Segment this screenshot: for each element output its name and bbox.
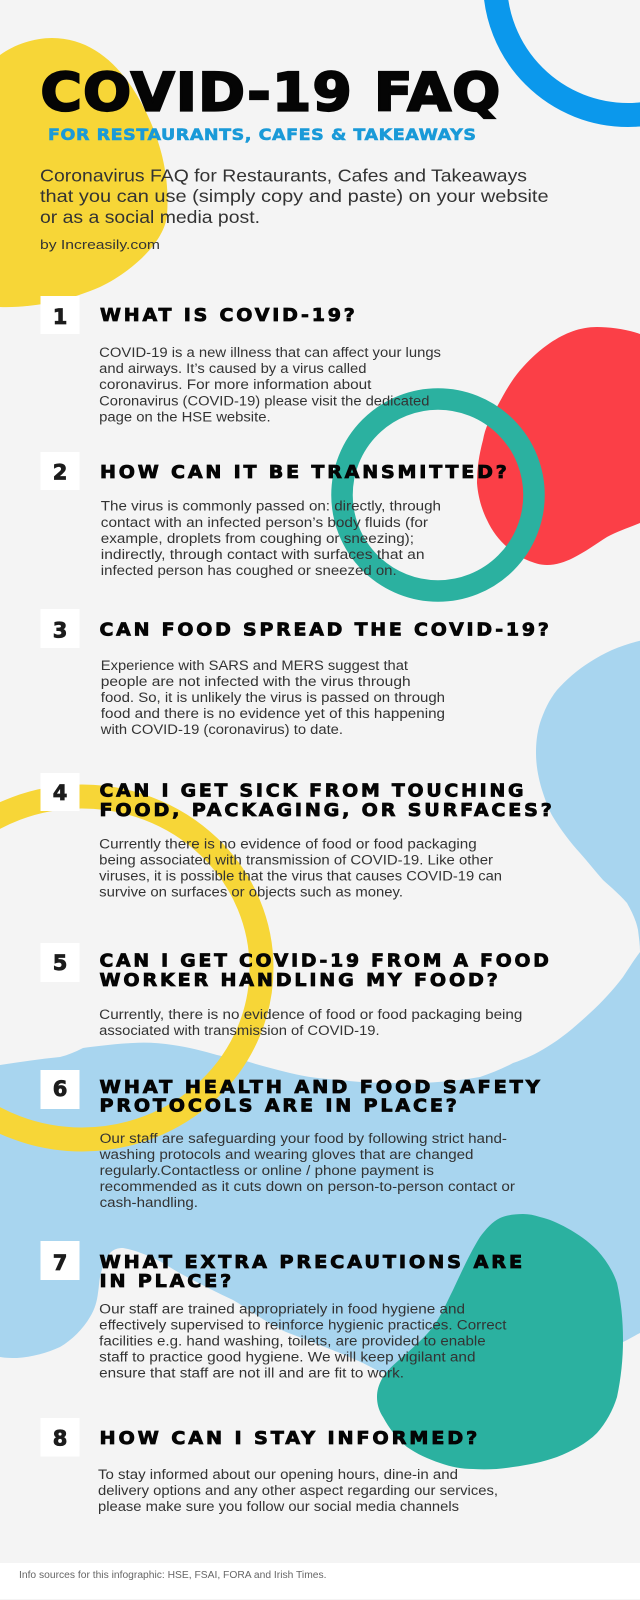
body 3: people are not infected with the virus through	[101, 674, 411, 689]
number badge 4: 4	[53, 781, 67, 805]
heading 5: WORKER HANDLING MY FOOD?	[100, 971, 501, 991]
heading 4	[100, 782, 555, 821]
number badge 1: 1	[53, 305, 67, 329]
intro text	[40, 165, 549, 227]
footer	[0, 1563, 640, 1599]
decorative blob: yellow top left	[0, 38, 168, 307]
header	[40, 62, 549, 252]
intro text: that you can use (simply copy and paste) on your website	[40, 186, 549, 206]
panel: FAQ 3	[40, 609, 552, 737]
body 6: cash-handling.	[100, 1195, 198, 1210]
number badge 7: 7	[53, 1251, 67, 1275]
body 4: being associated with transmission of COVID-19. Like other	[99, 852, 494, 867]
body 8: To stay informed about our opening hours, dine-in and	[98, 1467, 458, 1482]
panel: FAQ 7	[40, 1241, 525, 1381]
decorative ring: teal	[342, 399, 534, 591]
body 6: Our staff are safeguarding your food by following strict hand-	[100, 1131, 507, 1146]
body 1	[99, 345, 441, 424]
number badge 3: 3	[53, 619, 67, 643]
decorative blob: teal bottom right	[377, 1214, 623, 1469]
intro text: or as a social media post.	[40, 207, 260, 227]
intro text: Coronavirus FAQ for Restaurants, Cafes and Takeaways	[40, 165, 527, 185]
heading 7: WHAT EXTRA PRECAUTIONS ARE	[100, 1253, 525, 1273]
body 4	[99, 836, 502, 899]
subtitle: FOR RESTAURANTS, CAFES & TAKEAWAYS	[48, 125, 477, 144]
decorative blob: red	[477, 327, 640, 565]
title: COVID-19 FAQ	[40, 62, 502, 124]
heading 7: IN PLACE?	[100, 1272, 234, 1292]
number badge 7	[40, 1241, 80, 1280]
number badge 8: 8	[53, 1426, 67, 1450]
body 1: COVID-19 is a new illness that can affect your lungs	[99, 345, 441, 360]
body 3: food and there is no evidence yet of this happening	[101, 706, 445, 721]
body 8: delivery options and any other aspect regarding our services,	[98, 1483, 498, 1498]
footer sources text: Info sources for this infographic: HSE, FSAI, FORA and Irish Times.	[19, 1570, 326, 1581]
body 2: contact with an infected person’s body fluids (for	[101, 515, 429, 530]
decorative blob: light blue	[0, 641, 640, 1385]
body 2: example, droplets from coughing or sneezing);	[101, 531, 414, 546]
panel: FAQ 6	[40, 1070, 543, 1210]
body 2	[101, 499, 441, 578]
number badge 2: 2	[53, 461, 67, 485]
body 7: facilities e.g. hand washing, toilets, are provided to enable	[99, 1334, 486, 1348]
body 1: page on the HSE website.	[99, 410, 271, 424]
body 5	[99, 1007, 522, 1038]
body 1: Coronavirus (COVID-19) please visit the dedicated	[99, 394, 429, 408]
body 8	[98, 1467, 498, 1514]
number badge 1	[40, 296, 80, 334]
number badge 8	[40, 1418, 80, 1456]
body 4: survive on surfaces or objects such as money.	[99, 884, 403, 899]
body 2: indirectly, through contact with surfaces that an	[101, 547, 425, 562]
body 6: washing protocols and wearing gloves that are changed	[98, 1147, 474, 1162]
number badge 5: 5	[53, 951, 67, 975]
body 2: The virus is commonly passed on: directly, through	[101, 499, 441, 514]
body 8: please make sure you follow our social media channels	[98, 1499, 459, 1514]
heading 7	[100, 1253, 525, 1292]
number badge 3	[40, 609, 80, 648]
body 3: with COVID-19 (coronavirus) to date.	[100, 722, 343, 737]
body 4: viruses, it is possible that the virus that causes COVID-19 can	[99, 868, 502, 883]
number badge 6: 6	[53, 1077, 67, 1101]
decorative ring: yellow	[0, 796, 262, 1140]
body 7: effectively supervised to reinforce hygienic practices. Correct	[99, 1318, 507, 1333]
panel: FAQ 2	[40, 452, 510, 578]
body 2: infected person has coughed or sneezed on.	[101, 563, 397, 578]
byline: by Increasily.com	[40, 237, 160, 252]
body 3: food. So, it is unlikely the virus is passed on through	[101, 690, 445, 705]
body 7: Our staff are trained appropriately in food hygiene and	[99, 1301, 465, 1316]
heading 8: HOW CAN I STAY INFORMED?	[100, 1429, 480, 1449]
body 3	[100, 658, 445, 737]
body 3: Experience with SARS and MERS suggest that	[101, 658, 408, 673]
body 7: staff to practice good hygiene. We will keep vigilant and	[99, 1350, 475, 1365]
panel: FAQ 1	[40, 296, 441, 424]
panel: FAQ 4	[40, 773, 555, 899]
body 1: coronavirus. For more information about	[99, 377, 372, 392]
panel: FAQ 8	[40, 1418, 498, 1514]
heading 6: PROTOCOLS ARE IN PLACE?	[100, 1097, 460, 1117]
number badge 5	[40, 943, 80, 982]
body 6	[98, 1131, 516, 1210]
body 7: ensure that staff are not ill and are fit to work.	[99, 1366, 404, 1381]
heading 5	[100, 952, 552, 991]
body 4: Currently there is no evidence of food or food packaging	[99, 836, 477, 851]
body 6: regularly.Contactless or online / phone payment is	[100, 1163, 434, 1178]
body 7	[99, 1301, 507, 1381]
panel: FAQ 5	[40, 943, 552, 1038]
heading 6	[100, 1078, 543, 1117]
decorative ring: blue top right	[495, 0, 640, 115]
heading 5: CAN I GET COVID-19 FROM A FOOD	[100, 952, 552, 972]
body 6: recommended as it cuts down on person-to-person contact or	[100, 1179, 516, 1194]
heading 2: HOW CAN IT BE TRANSMITTED?	[100, 463, 510, 483]
body 1: and airways. It’s caused by a virus called	[99, 361, 366, 376]
number badge 4	[40, 773, 80, 811]
heading 4: FOOD, PACKAGING, OR SURFACES?	[100, 801, 555, 821]
heading 4: CAN I GET SICK FROM TOUCHING	[100, 782, 526, 802]
heading 6: WHAT HEALTH AND FOOD SAFETY	[100, 1078, 543, 1098]
body 5: Currently, there is no evidence of food or food packaging being	[99, 1007, 522, 1022]
heading 1: WHAT IS COVID-19?	[100, 306, 358, 326]
body 5: associated with transmission of COVID-19.	[99, 1023, 380, 1038]
number badge 6	[40, 1070, 80, 1109]
number badge 2	[40, 452, 80, 490]
heading 3: CAN FOOD SPREAD THE COVID-19?	[100, 621, 552, 641]
